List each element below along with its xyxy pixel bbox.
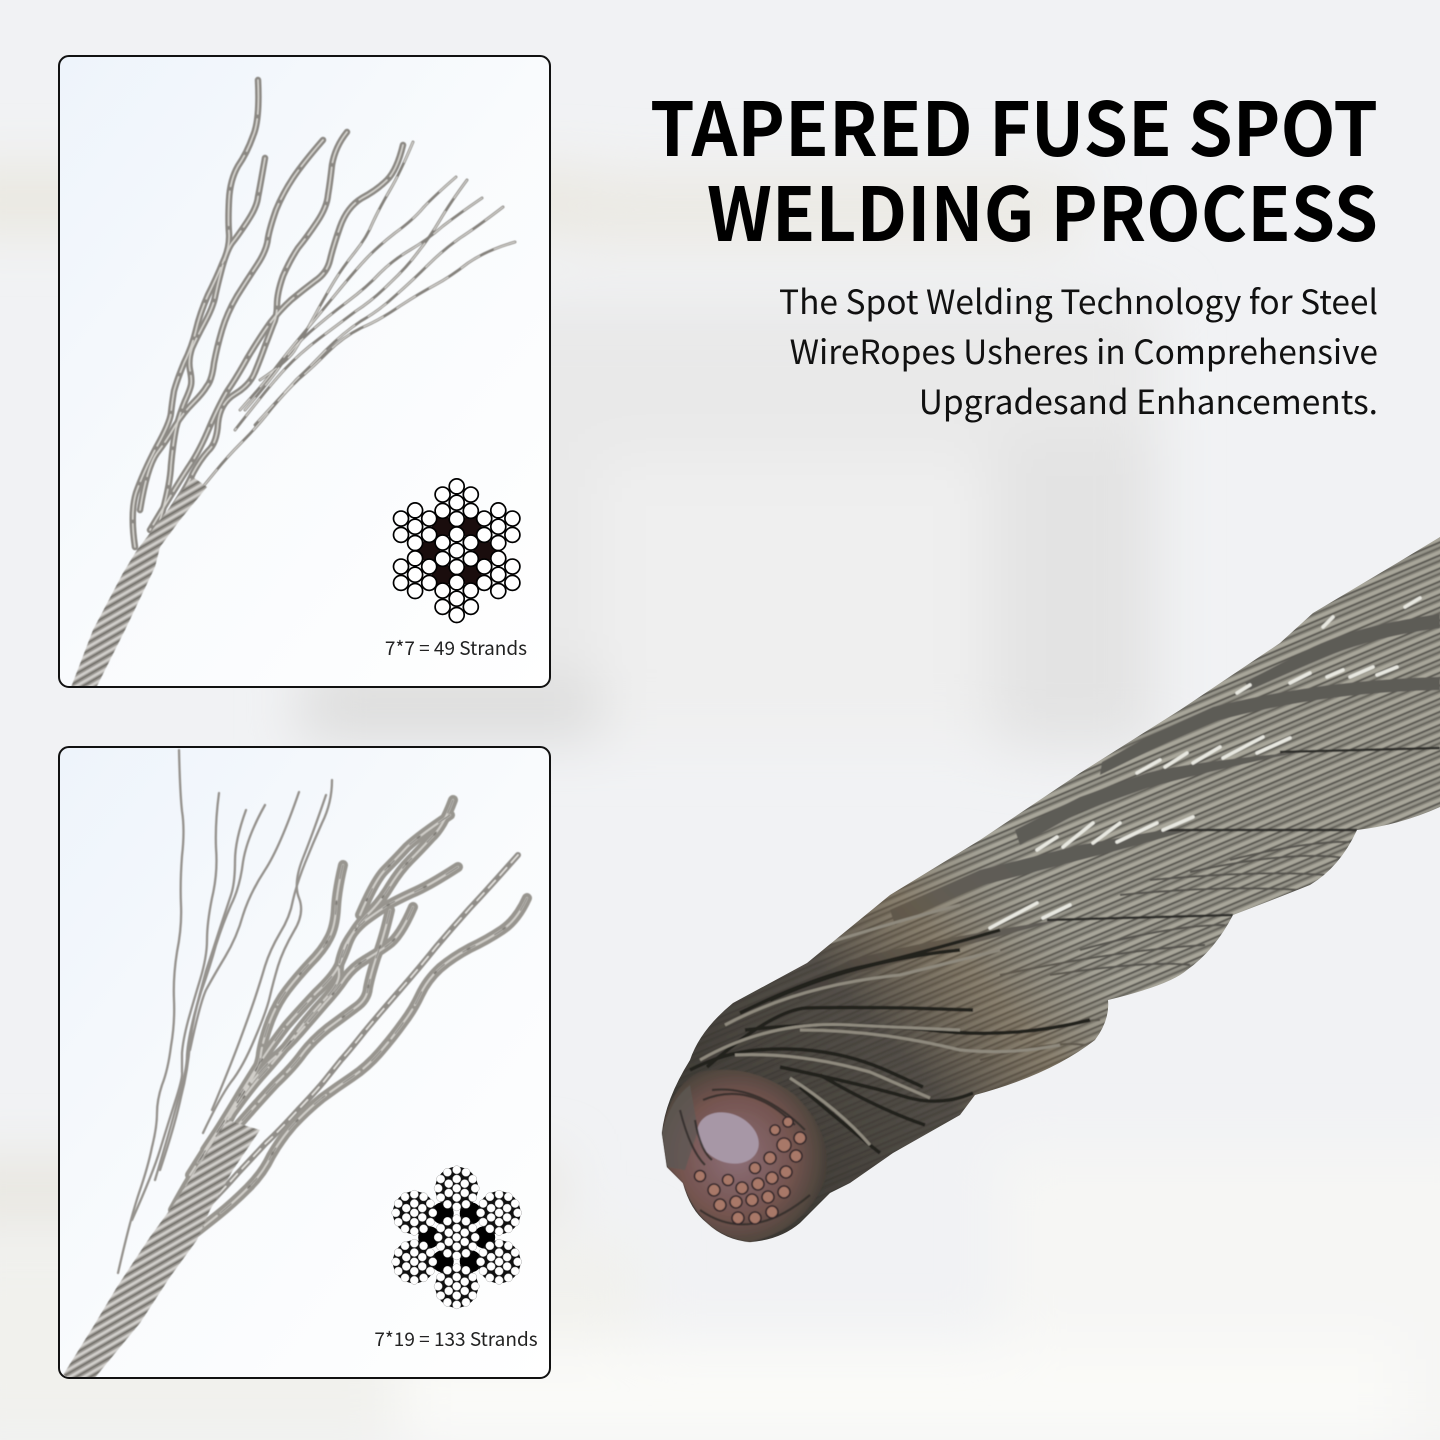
photo: unravelled 7x7 rope strands: [70, 80, 515, 690]
photo: unravelled 7x19 rope strands: [60, 750, 527, 1380]
panel: 7x19 wire rope: [59, 747, 550, 1380]
caption: 7*7: 7*7 = 49 Strands: [385, 634, 527, 661]
tip wires: [690, 930, 1090, 1153]
subtitle text: [779, 275, 1378, 424]
photo: welded steel cable: [640, 500, 1440, 1260]
panel: 7x7 wire rope: [59, 56, 550, 690]
diagram: 7x7 cross-section: [394, 479, 520, 622]
subtitle text: WireRopes Usheres in Comprehensive: [790, 325, 1378, 374]
caption: 7*19: 7*19 = 133 Strands: [374, 1325, 538, 1352]
curved wires on scallops: [980, 842, 1352, 1060]
weld cap: [662, 1070, 827, 1242]
title: TAPERED FUSE SPOT: [650, 71, 1378, 178]
bright wire highlights: [990, 598, 1420, 928]
subtitle text: Upgradesand Enhancements.: [919, 375, 1378, 424]
title: WELDING PROCESS: [707, 156, 1378, 263]
diagram: 7x19 cross-section: [392, 1166, 522, 1309]
subtitle text: The Spot Welding Technology for Steel: [779, 275, 1378, 324]
dark strand bands: [790, 614, 1440, 1000]
title: [650, 71, 1378, 263]
